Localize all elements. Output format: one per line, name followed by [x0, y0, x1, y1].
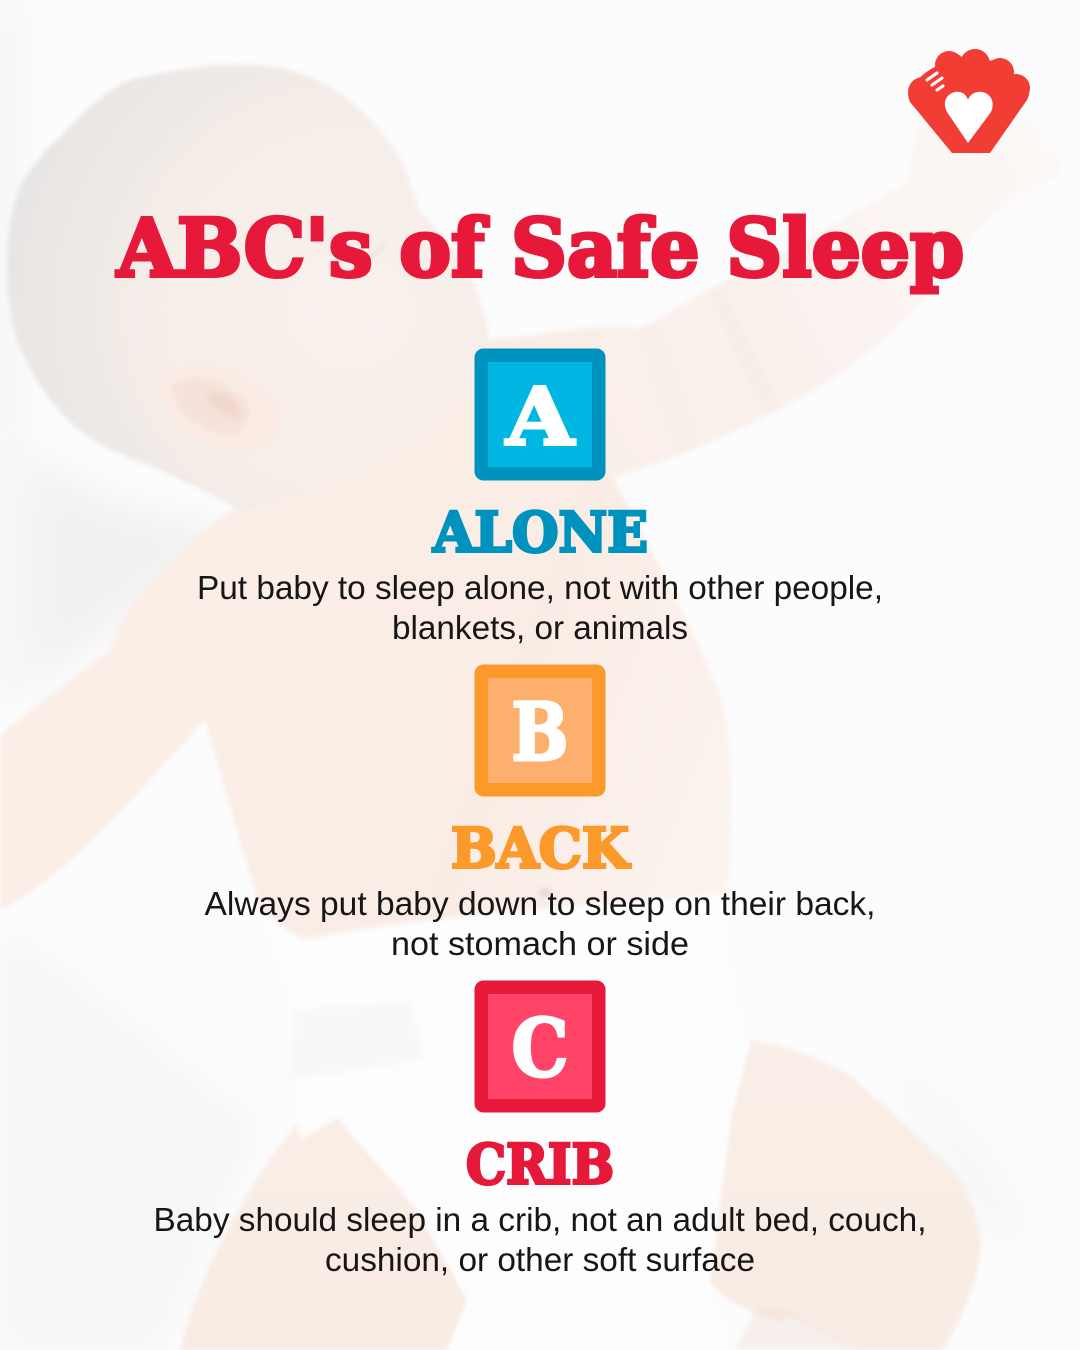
baby: ear [160, 364, 283, 453]
text back: not stomach or side [391, 925, 689, 962]
block C: C [512, 1001, 568, 1095]
logo: red hand with heart [908, 49, 1030, 153]
text crib: Baby should sleep in a crib, not an adult bed, couch, [154, 1201, 926, 1238]
block C [474, 980, 606, 1112]
baby: right thigh [709, 1040, 981, 1350]
text alone: Put baby to sleep alone, not with other people, [197, 569, 883, 606]
block A [474, 348, 606, 480]
title: ABC's of Safe Sleep [116, 201, 964, 295]
baby: head [7, 65, 488, 510]
block A: A [505, 370, 575, 464]
baby: left thigh [180, 1117, 468, 1350]
text back [204, 885, 876, 962]
section: crib [154, 980, 926, 1278]
baby: torso and left arm [0, 330, 732, 945]
text alone: blankets, or animals [392, 609, 688, 646]
heading alone: ALONE [432, 500, 648, 564]
heading crib: CRIB [466, 1132, 614, 1196]
section: back [204, 664, 876, 962]
eyelid line [362, 245, 385, 258]
block B: B [512, 685, 568, 779]
section: alone [197, 348, 883, 646]
block B [474, 664, 606, 796]
baby: lower leg fold [735, 1306, 860, 1350]
text crib: cushion, or other soft surface [325, 1241, 755, 1278]
baby: right arm and hand [540, 113, 1061, 477]
text back: Always put baby down to sleep on their back, [204, 885, 876, 922]
heading back: BACK [451, 816, 631, 880]
text crib [154, 1201, 926, 1278]
diaper [262, 895, 750, 1350]
text alone [197, 569, 883, 646]
